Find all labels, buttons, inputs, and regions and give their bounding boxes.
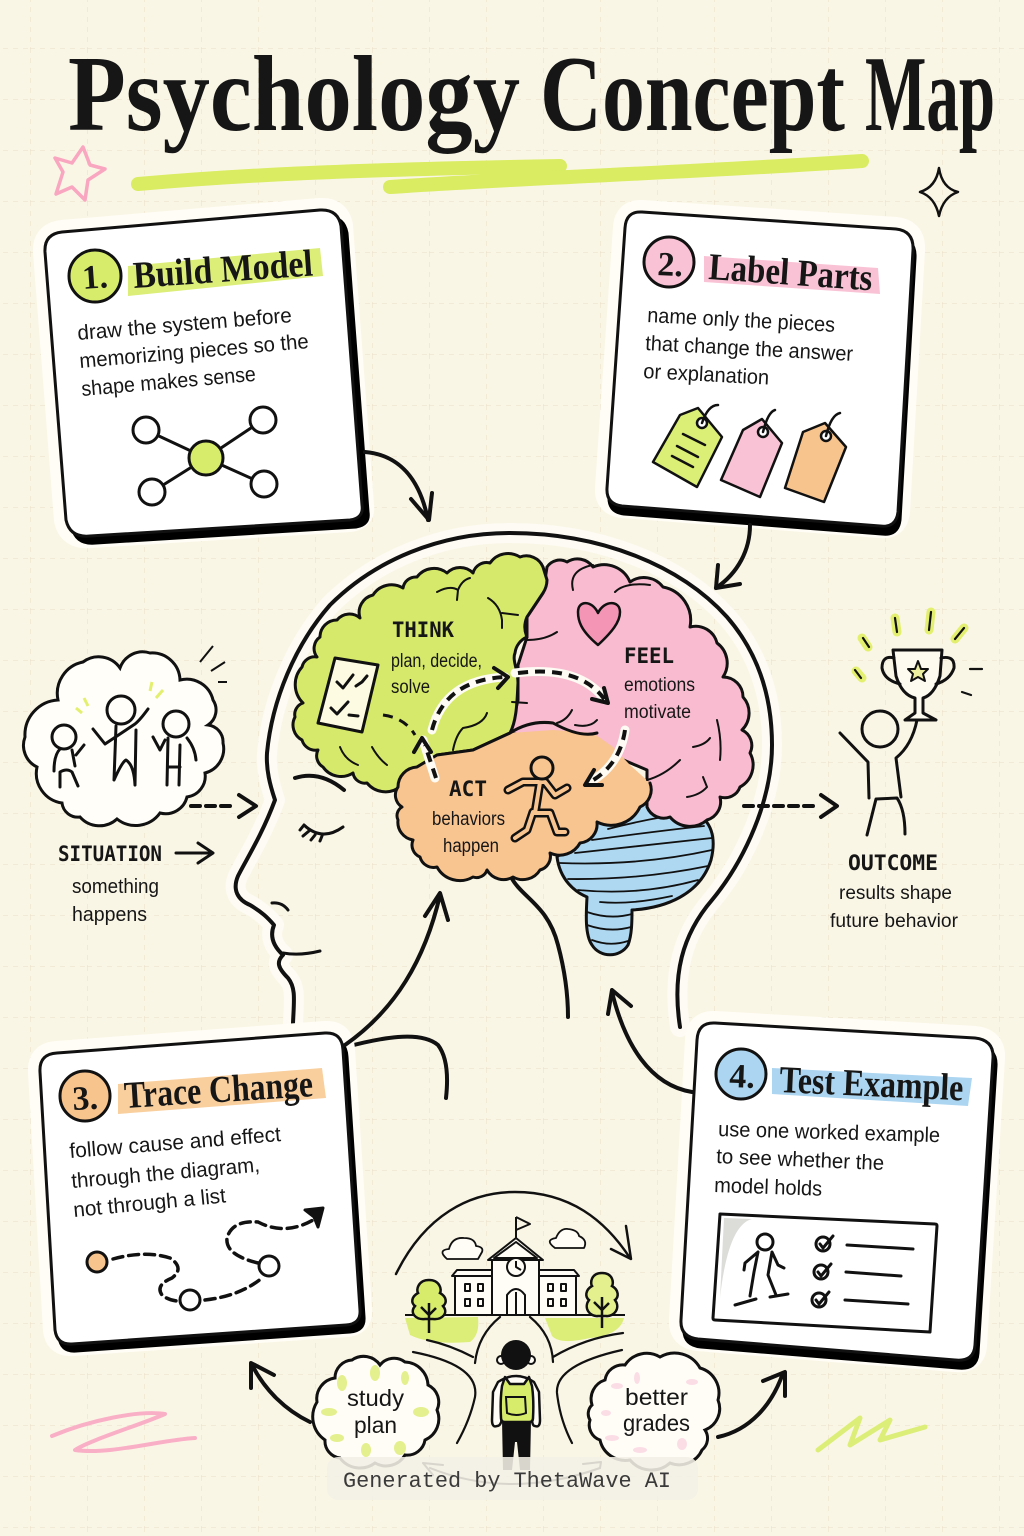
icon: dashed cause effect path [87, 1208, 323, 1310]
icon: lime sparks [76, 682, 163, 713]
scene: school and student [396, 1192, 631, 1470]
icon: running figure [508, 757, 567, 838]
text: feel [624, 644, 695, 723]
icon: victory rays [855, 612, 982, 695]
text block: label parts description: that change the answer [645, 332, 854, 366]
arc arrow over school [396, 1192, 631, 1274]
text: situation: SITUATION [58, 842, 162, 866]
faded arc arrow [423, 1462, 601, 1484]
cerebellum [557, 800, 713, 955]
icon: three people [52, 696, 196, 787]
icon: pink star [55, 147, 105, 200]
footer watermark: Generated by ThetaWave AI [343, 1469, 671, 1494]
number badge 4 [716, 1049, 766, 1099]
text block: label parts description: or explanation [643, 360, 770, 390]
cloud: study plan [313, 1356, 439, 1468]
icon: right tree [586, 1273, 618, 1328]
brain folds [340, 565, 721, 797]
number badge 2 [644, 237, 694, 287]
text block: trace change description: through the diagram, [70, 1154, 261, 1193]
text block: trace change description: follow cause and effect [69, 1123, 282, 1163]
icon: student [492, 1340, 540, 1470]
text block: build model description: shape makes sense [80, 363, 257, 401]
text block: test example description: to see whether the [716, 1145, 885, 1175]
grass patches [405, 1317, 624, 1343]
number badge 1: 1. [81, 258, 109, 297]
cloud: better grades: grades [623, 1410, 690, 1436]
arrows: think feel act cycle [383, 668, 625, 785]
number badge 2: 2. [657, 246, 684, 284]
text block: test example description [714, 1118, 940, 1201]
text block: trace change description [69, 1123, 282, 1222]
text: think: solve [391, 677, 430, 698]
eyebrow [295, 776, 344, 790]
title underline highlight [138, 161, 862, 187]
arrow: situation dashed [191, 795, 256, 817]
icon: school building [405, 1217, 625, 1315]
icon: network model [133, 407, 277, 505]
cloud: study plan: study [347, 1385, 405, 1411]
text block: build model description [76, 304, 310, 401]
text: act: happen [443, 836, 499, 857]
text: outcome: future behavior [830, 911, 959, 932]
lobe: feel (pink) [510, 559, 753, 826]
panel: situation cloud [23, 646, 227, 826]
figure [840, 711, 917, 835]
text block: build model description: draw the system before [76, 304, 293, 345]
arrow: card 3 to brain [345, 893, 448, 1045]
icon: clouds [442, 1229, 585, 1259]
panel: label parts card [607, 212, 915, 534]
number badge 3 [60, 1071, 110, 1121]
text: act [432, 777, 505, 857]
icon: left tree [412, 1280, 446, 1333]
text: think [391, 618, 482, 698]
text block: label parts description: name only the pieces [647, 304, 836, 337]
icon: heart [578, 603, 620, 645]
icon: pink tag [721, 410, 782, 497]
panel: trace change card [40, 1033, 364, 1351]
heading: build model: Build Model [132, 243, 314, 297]
closed eye [300, 825, 343, 841]
title: Psychology [68, 35, 520, 154]
heading: test example: Test Example [779, 1059, 964, 1109]
text: outcome: results shape [839, 883, 952, 904]
arrow: card 2 to brain [716, 525, 750, 588]
text: act: behaviors [432, 809, 505, 830]
footer watermark [327, 1457, 698, 1500]
cloud: study plan: plan [354, 1412, 397, 1438]
cloud: better grades: better [625, 1384, 688, 1410]
brain [293, 554, 753, 955]
arrow: card 1 to brain [365, 452, 432, 520]
text: think: plan, decide, [391, 651, 482, 672]
arrow: card 4 to brain [608, 990, 692, 1092]
title: Concept [540, 35, 845, 154]
panel: build model card [45, 210, 368, 543]
number badge 3: 3. [71, 1080, 99, 1118]
icon: trophy [882, 650, 954, 720]
collar line [346, 1037, 447, 1098]
arrow: study plan to card 3 [251, 1363, 310, 1422]
heading: label parts: Label Parts [707, 246, 874, 299]
scribble: lime [818, 1418, 925, 1450]
heading: trace change: Trace Change [123, 1063, 314, 1117]
icon: sparkle [920, 168, 958, 216]
lobe: think (lime) [293, 554, 547, 792]
icon: person with trophy [840, 612, 982, 835]
text block: trace change description: not through a list [72, 1184, 227, 1222]
text: situation: something [72, 876, 159, 898]
number badge 1 [69, 250, 121, 302]
mouth and nose detail [272, 903, 320, 954]
icon: lime tag [653, 405, 722, 487]
text: think: THINK [392, 618, 454, 642]
icon: motion ticks [200, 646, 227, 682]
icon: climbing figure [735, 1234, 788, 1305]
text: outcome [830, 851, 959, 932]
text: act: ACT [449, 777, 487, 801]
road lines [413, 1317, 623, 1443]
icon: clipboard checklist [318, 658, 378, 732]
text: feel: FEEL [624, 644, 674, 668]
head outline [236, 533, 772, 1098]
text: situation [58, 842, 162, 926]
neck back line [511, 877, 568, 1017]
text: feel: motivate [624, 702, 691, 723]
panel: test example card [681, 1023, 996, 1368]
text block: test example description: model holds [714, 1174, 823, 1201]
text block: test example description: use one worked example [718, 1118, 940, 1147]
title [68, 35, 995, 154]
text: feel: emotions [624, 675, 695, 696]
arrow: outcome dashed [744, 795, 837, 817]
worked example panel [713, 1214, 937, 1332]
text block: build model description: memorizing pieces so the [78, 330, 310, 373]
text block: label parts description [643, 304, 854, 390]
lobe: act (orange) [395, 722, 651, 881]
arrow: situation label [176, 843, 213, 863]
number badge 4: 4. [729, 1058, 755, 1096]
icon: orange tag [785, 413, 846, 502]
scribble: pink [52, 1413, 195, 1451]
cloud: better grades [588, 1353, 720, 1470]
text: situation: happens [72, 904, 147, 926]
text: outcome: OUTCOME [848, 851, 938, 875]
checklist [812, 1236, 913, 1307]
arrow: better grades to card 4 [718, 1372, 785, 1437]
